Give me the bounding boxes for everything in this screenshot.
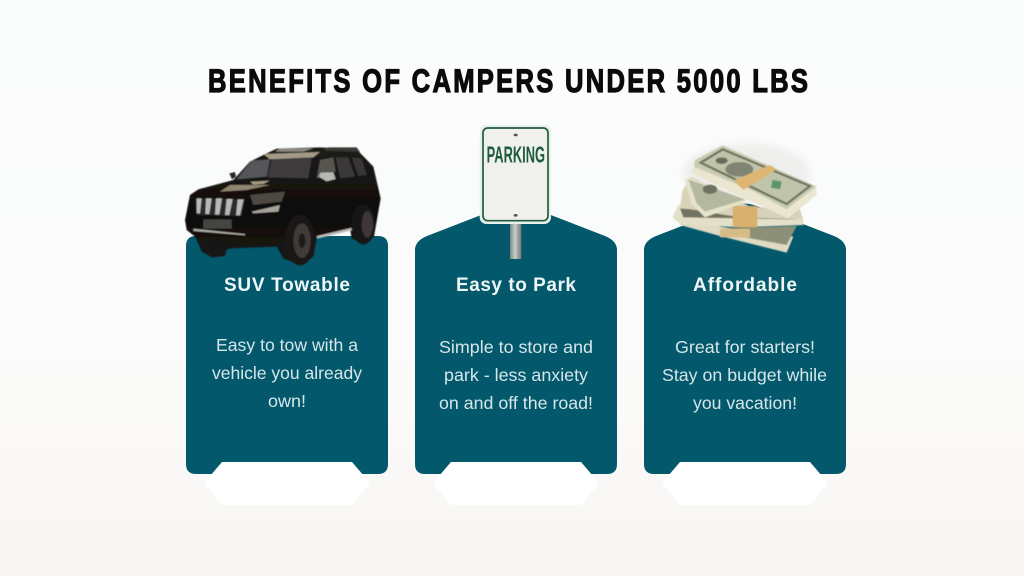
heading: Easy to Park (456, 275, 576, 296)
description: own! (268, 391, 306, 411)
description (439, 337, 593, 413)
sign text: PARKING (487, 142, 545, 168)
card background (186, 236, 388, 474)
heading: SUV Towable (224, 275, 350, 296)
sign post (510, 222, 521, 259)
description: vehicle you already (212, 363, 362, 383)
description: Great for starters! (675, 337, 815, 357)
title: BENEFITS OF CAMPERS UNDER 5000 LBS (208, 64, 808, 100)
description: Simple to store and (439, 337, 593, 357)
bottom white tab (433, 462, 599, 505)
sign plate (480, 125, 551, 224)
panel: Easy to Park (415, 125, 617, 505)
icon: black SUV (185, 147, 381, 265)
icon: stacks of cash (673, 143, 817, 253)
description: Easy to tow with a (216, 335, 358, 355)
description: Stay on budget while (662, 365, 827, 385)
panel: SUV Towable (185, 147, 388, 505)
heading: Affordable (693, 275, 797, 296)
bottom white tab (204, 462, 370, 505)
description: on and off the road! (439, 393, 593, 413)
card background (644, 204, 846, 474)
card background (415, 204, 617, 474)
description (662, 337, 827, 413)
description (212, 335, 362, 411)
icon: parking sign (480, 125, 551, 259)
description: you vacation! (693, 393, 797, 413)
bottom white tab (662, 462, 828, 505)
panel: Affordable (644, 143, 846, 505)
description: park - less anxiety (444, 365, 588, 385)
